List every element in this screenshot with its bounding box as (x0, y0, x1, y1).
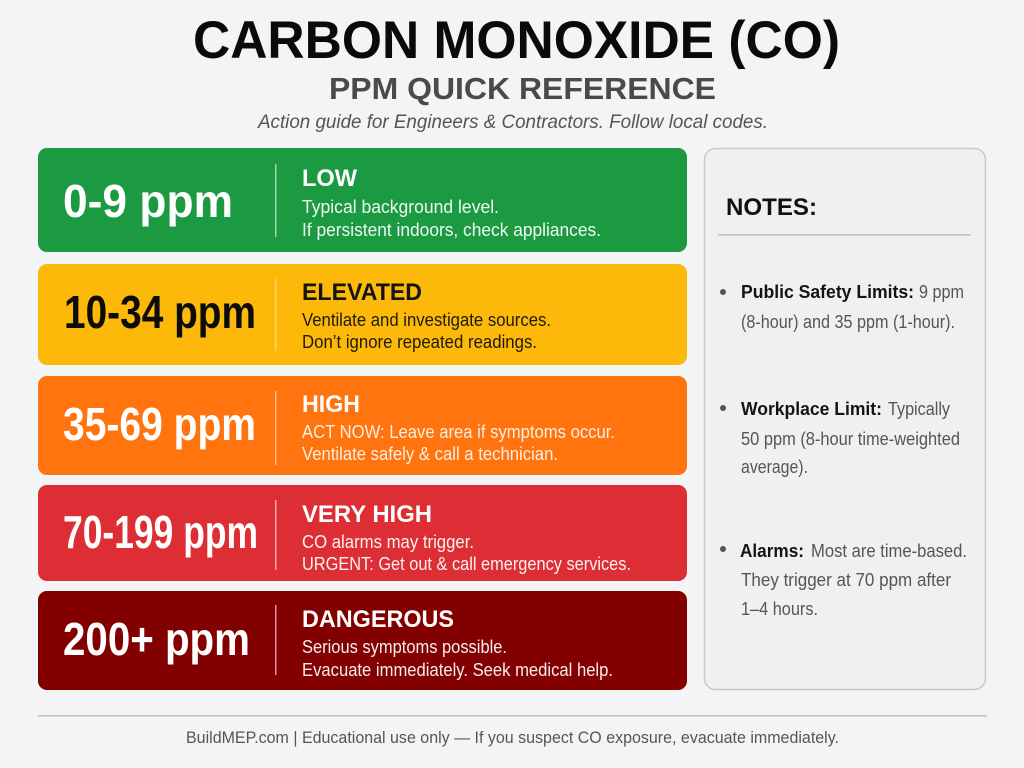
level: ELEVATED: ELEVATED (302, 279, 422, 306)
note: alarms (720, 541, 967, 619)
notes heading: NOTES: (726, 194, 817, 221)
note: workplace limit (720, 399, 960, 477)
action text: elevated: Don’t ignore repeated readings. (302, 332, 537, 352)
action text: elevated (302, 310, 551, 352)
range: 200+ ppm: 200+ ppm (63, 613, 250, 665)
panel: dangerous level 200+ ppm (38, 591, 687, 690)
note: public safety limits: (8-hour) and 35 ppm (1-hour). (741, 312, 955, 332)
action text: high: Ventilate safely & call a technician. (302, 444, 558, 464)
panel: elevated level 10-34 ppm (38, 264, 687, 365)
range: 70-199 ppm: 70-199 ppm (63, 506, 258, 558)
action text: high: ACT NOW: Leave area if symptoms occur. (302, 422, 615, 442)
action text: very high: CO alarms may trigger. (302, 532, 474, 552)
action text: high (302, 422, 615, 464)
action text: very high (302, 532, 631, 574)
level: LOW: LOW (302, 165, 357, 192)
action text: low: Typical background level. (302, 197, 499, 217)
level: VERY HIGH: VERY HIGH (302, 501, 432, 528)
note: public safety limits: Public Safety Limits: (741, 282, 914, 302)
panel: high level 35-69 ppm (38, 376, 687, 475)
panel: notes (704, 148, 986, 690)
action text: elevated: Ventilate and investigate sources. (302, 310, 551, 330)
range: 35-69 ppm: 35-69 ppm (63, 398, 256, 450)
note: alarms: They trigger at 70 ppm after (741, 570, 951, 590)
note: workplace limit: 50 ppm (8-hour time-weighted (741, 429, 960, 449)
action text: low: If persistent indoors, check appliances. (302, 220, 601, 240)
panel: low level 0-9 ppm (38, 148, 687, 252)
note: public safety limits (720, 282, 964, 332)
tagline: Action guide for Engineers & Contractors. Follow local codes. (257, 112, 768, 133)
title: CARBON MONOXIDE (CO) (193, 11, 840, 70)
panel: very high level 70-199 ppm (38, 485, 687, 581)
action text: very high: URGENT: Get out & call emergency services. (302, 554, 631, 574)
footer: BuildMEP.com | Educational use only — If you suspect CO exposure, evacuate immediately. (186, 729, 839, 747)
range: 10-34 ppm: 10-34 ppm (64, 286, 256, 338)
action text: dangerous: Evacuate immediately. Seek medical help. (302, 660, 613, 680)
note: alarms: Most are time-based. (811, 541, 967, 561)
note: alarms: 1–4 hours. (741, 599, 818, 619)
note: workplace limit: Typically (888, 399, 950, 419)
note: workplace limit: Workplace Limit: (741, 399, 882, 419)
action text: dangerous: Serious symptoms possible. (302, 637, 507, 657)
note: alarms: Alarms: (740, 541, 804, 561)
subtitle: PPM QUICK REFERENCE (329, 71, 716, 106)
action text: dangerous (302, 637, 613, 680)
note: public safety limits: 9 ppm (919, 282, 964, 302)
action text: low (302, 197, 601, 240)
range: 0-9 ppm: 0-9 ppm (63, 175, 233, 227)
level: HIGH: HIGH (302, 391, 360, 418)
level: DANGEROUS: DANGEROUS (302, 606, 454, 633)
note: workplace limit: average). (741, 457, 808, 477)
